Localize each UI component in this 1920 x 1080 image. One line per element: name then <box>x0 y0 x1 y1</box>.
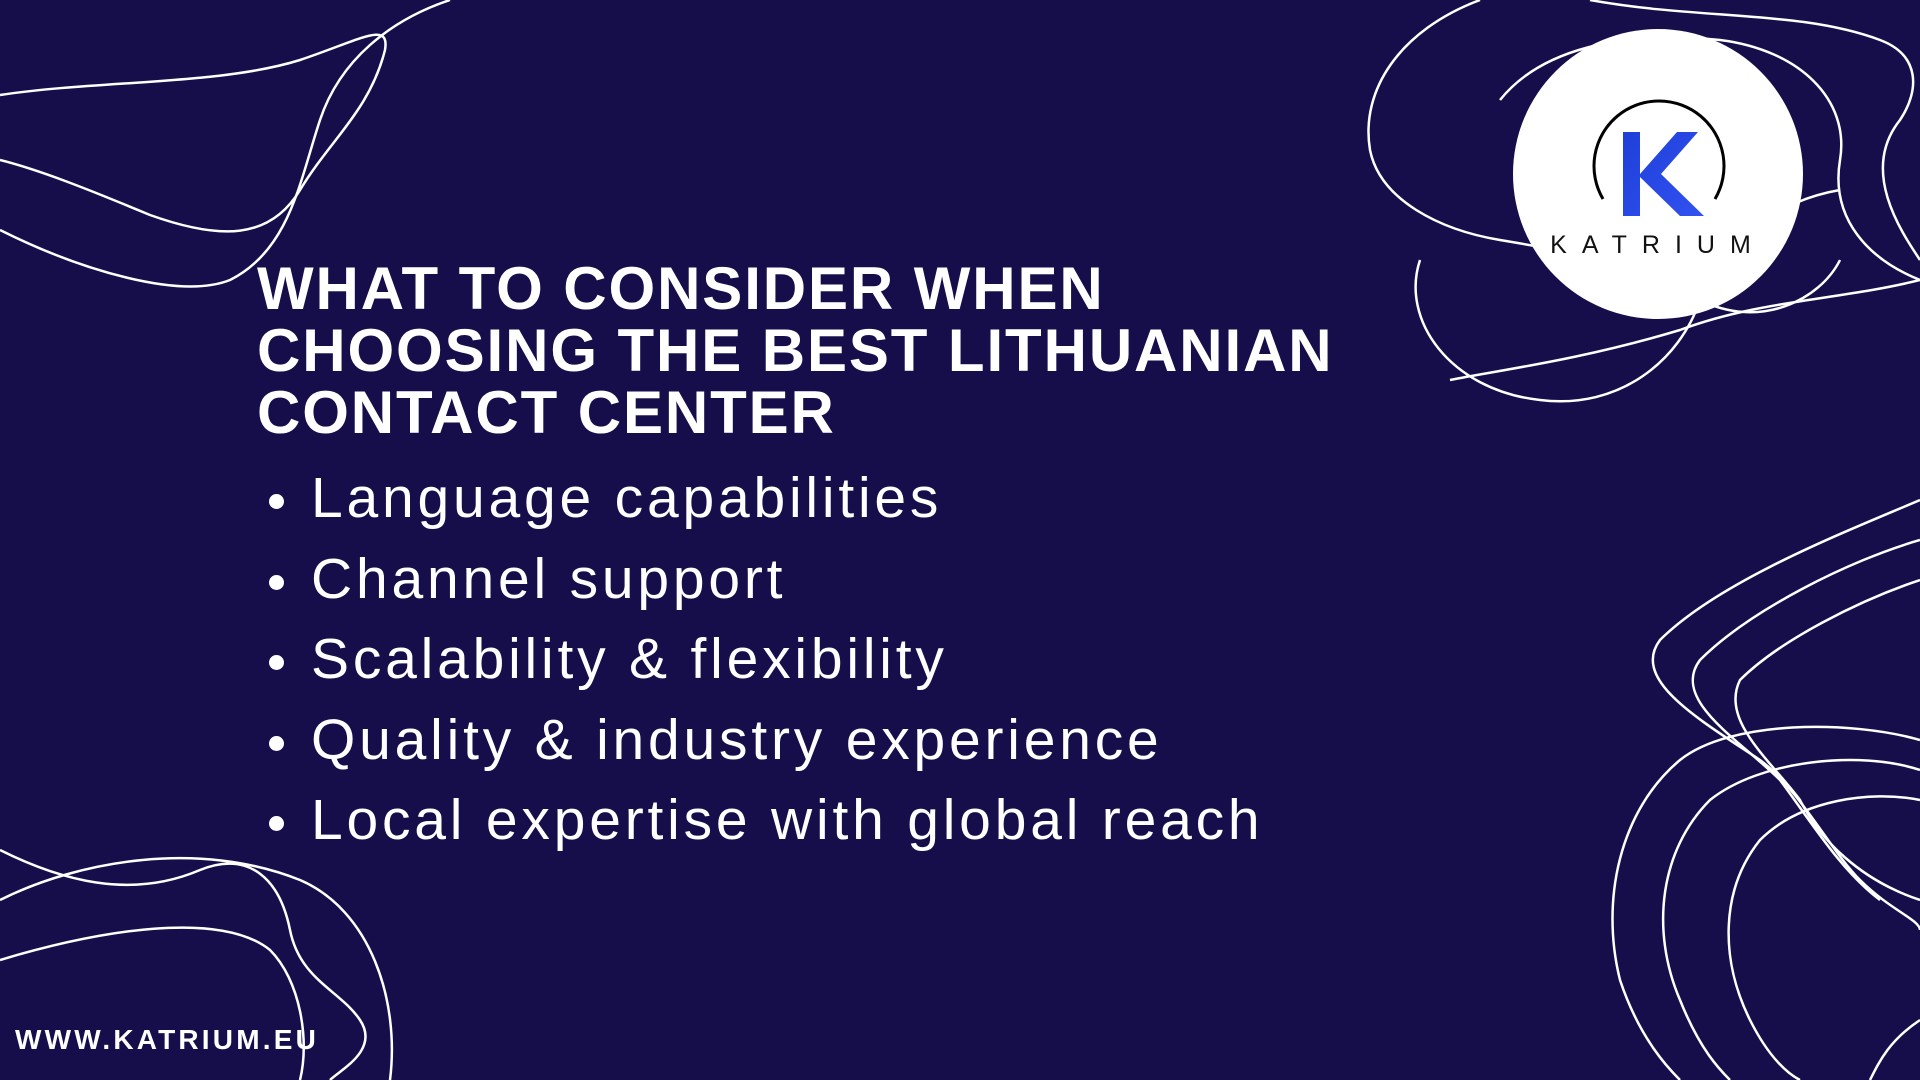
bullet list: Channel support <box>311 546 786 610</box>
bullet list: Local expertise with global reach <box>311 788 1263 852</box>
bullet list: Language capabilities <box>311 466 942 530</box>
title: WHAT TO CONSIDER WHEN <box>257 255 1105 322</box>
logo <box>1513 29 1803 319</box>
title: CONTACT CENTER <box>257 379 836 446</box>
title <box>257 255 1334 446</box>
bullet list: Quality & industry experience <box>311 708 1163 772</box>
bullet list <box>269 466 1263 852</box>
logo wordmark: KATRIUM <box>1550 231 1766 259</box>
bullet list: Scalability & flexibility <box>311 627 948 691</box>
title: CHOOSING THE BEST LITHUANIAN <box>257 317 1334 384</box>
website url: WWW.KATRIUM.EU <box>15 1024 319 1055</box>
